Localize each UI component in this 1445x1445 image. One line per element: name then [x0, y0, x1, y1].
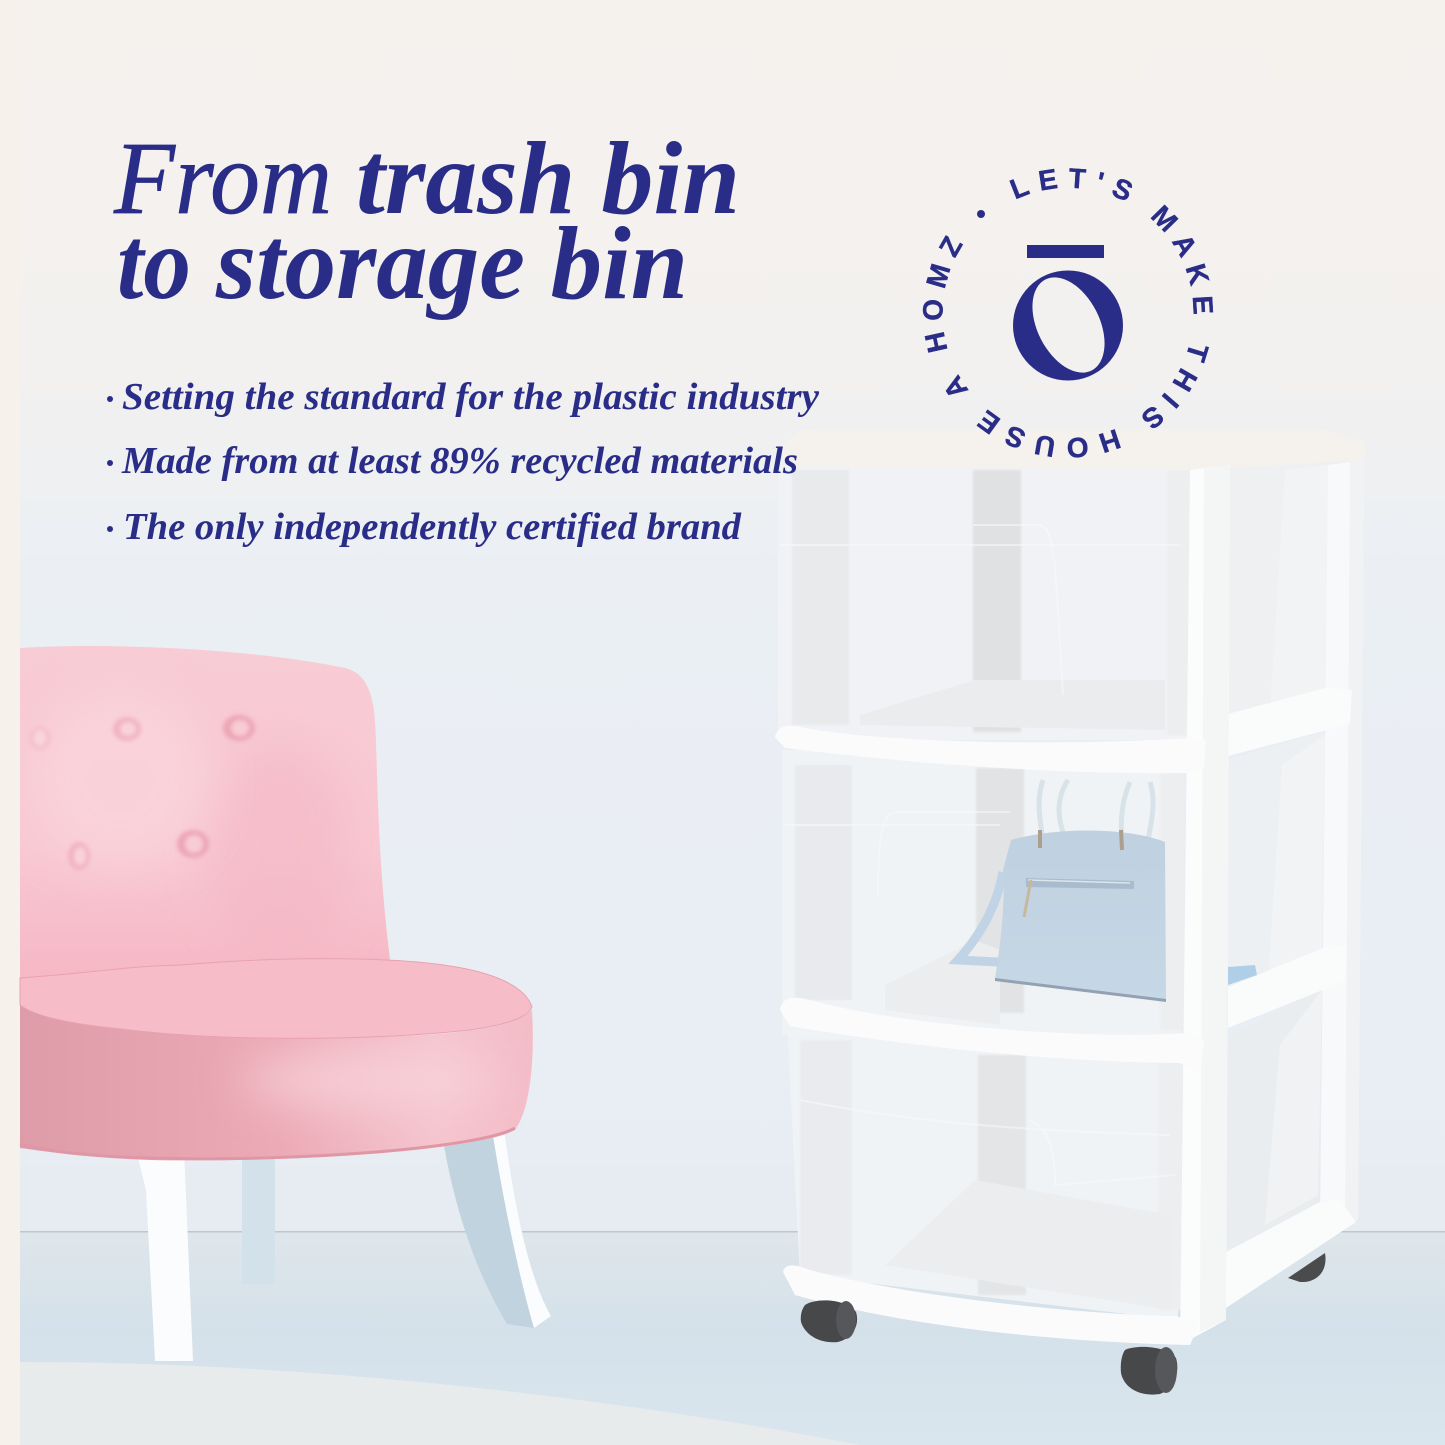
storage drawers unit: [775, 429, 1365, 1395]
background: floor: [20, 1232, 1445, 1445]
bullet list: [107, 376, 819, 548]
bullet 2: Made from at least 89% recycled materials: [121, 440, 798, 482]
front column: [1180, 465, 1230, 1345]
chair back: [20, 640, 395, 990]
top lid: [776, 429, 1365, 470]
title: to: [117, 206, 191, 321]
side rails: [1228, 688, 1352, 756]
logo badge: [922, 168, 1214, 458]
white frame: [775, 460, 1364, 1345]
front right wheel: [1121, 1347, 1177, 1395]
title: trash bin: [356, 121, 740, 236]
background: rug: [20, 1362, 860, 1445]
drawer floors and handle lines: [780, 525, 1180, 1310]
rear wheel: [1288, 1253, 1326, 1282]
title: From: [113, 121, 332, 236]
back columns: [792, 470, 1191, 1310]
blue handbag: [958, 780, 1257, 1002]
slogan dot: [977, 210, 985, 218]
background: left margin strip: [0, 0, 20, 1445]
logo bar: [1027, 245, 1104, 258]
logo ring: [1013, 265, 1123, 385]
drawer panels: [778, 465, 1330, 1320]
bullet 3: The only independently certified brand: [123, 506, 742, 548]
chair buttons: [29, 715, 255, 870]
wheels: [801, 1300, 1177, 1395]
circular slogan: LET'S MAKE THIS HOUSE A HOMZ: [922, 168, 1214, 458]
front left wheel: [801, 1300, 857, 1342]
chair legs: [136, 1135, 551, 1361]
bullet 1: Setting the standard for the plastic industry: [122, 376, 819, 418]
background: baseboard: [20, 1165, 1445, 1232]
title: [113, 121, 740, 321]
chair seat cushion: [20, 959, 532, 1038]
pink armchair: [20, 640, 551, 1361]
chair seat base: [20, 1006, 533, 1160]
right post: [1320, 460, 1364, 1225]
title: storage bin: [215, 206, 688, 321]
front rails: [775, 726, 1206, 773]
